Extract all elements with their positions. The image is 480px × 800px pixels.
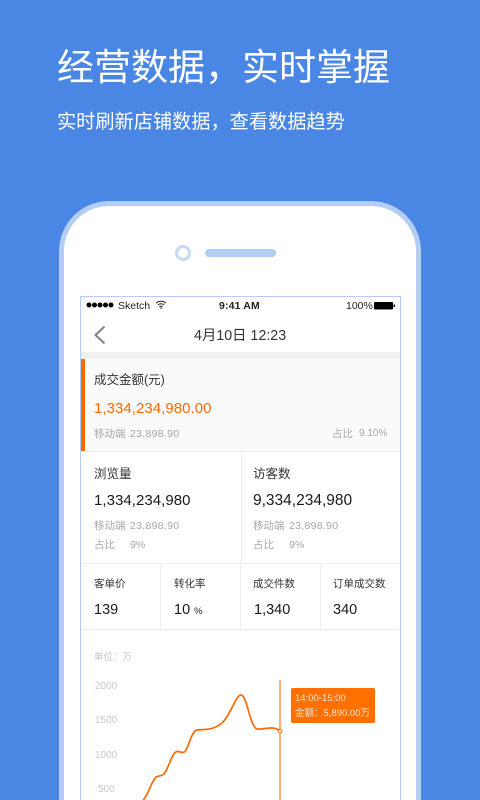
visitors value: 9,334,234,980 bbox=[253, 492, 352, 509]
status bar bbox=[86, 300, 395, 312]
marker line bbox=[279, 680, 281, 800]
views label: 浏览量 bbox=[94, 467, 132, 481]
sales mobile stat: 23,898.90 bbox=[130, 428, 179, 440]
items label: 成交件数 bbox=[253, 578, 295, 590]
items value: 1,340 bbox=[254, 602, 290, 618]
title: 经营数据，实时掌握 bbox=[57, 47, 390, 88]
views mobile stat: 移动端 bbox=[94, 520, 126, 532]
views mobile stat: 23,898.90 bbox=[130, 520, 179, 532]
panel: sales amount bbox=[81, 359, 400, 452]
panel: unit price bbox=[81, 564, 161, 630]
sales label: 成交金额(元) bbox=[94, 373, 165, 387]
panel: page views bbox=[81, 452, 242, 564]
visitors mobile stat bbox=[253, 520, 338, 532]
conversion value: 10 % bbox=[174, 602, 203, 618]
views share stat: 9% bbox=[130, 539, 145, 551]
line chart bbox=[142, 680, 282, 800]
sales share stat bbox=[332, 428, 387, 440]
tooltip time: 14:00-15:00 bbox=[295, 693, 346, 704]
views share stat bbox=[94, 539, 145, 551]
views share stat: 占比 bbox=[94, 539, 115, 551]
visitors label: 访客数 bbox=[253, 467, 291, 481]
unit price label: 客单价 bbox=[94, 578, 126, 590]
visitors share stat bbox=[253, 539, 304, 551]
tooltip amount: 金额：5,890.00万 bbox=[295, 708, 370, 719]
unit price value: 139 bbox=[94, 602, 118, 618]
carrier: Sketch bbox=[118, 300, 150, 312]
phone body bbox=[59, 201, 421, 800]
icon: back chevron bbox=[94, 326, 106, 344]
sales value: 1,334,234,980.00 bbox=[94, 400, 212, 417]
visitors share stat: 占比 bbox=[253, 539, 274, 551]
tooltip bbox=[291, 688, 375, 723]
panel: orders bbox=[321, 564, 400, 630]
panel: visitors bbox=[242, 452, 400, 564]
conversion label: 转化率 bbox=[174, 578, 206, 590]
y-axis labels bbox=[95, 681, 117, 795]
phone screen bbox=[80, 296, 401, 800]
clock: 9:41 AM bbox=[219, 300, 260, 312]
marker dot bbox=[278, 730, 282, 733]
views value: 1,334,234,980 bbox=[94, 492, 191, 509]
y-axis labels: 1000 bbox=[95, 750, 117, 761]
phone camera bbox=[175, 245, 191, 261]
panel: items sold bbox=[241, 564, 321, 630]
accent bar bbox=[81, 359, 85, 451]
sales share stat: 9.10% bbox=[359, 428, 387, 439]
panel: conversion rate bbox=[161, 564, 241, 630]
nav title: 4月10日 12:23 bbox=[194, 328, 286, 344]
chart unit label: 单位：万 bbox=[94, 652, 132, 663]
y-axis labels: 1500 bbox=[95, 715, 117, 726]
y-axis labels: 2000 bbox=[95, 681, 117, 692]
icon: battery bbox=[374, 302, 395, 310]
signal dots bbox=[86, 302, 114, 308]
visitors share stat: 9% bbox=[289, 539, 304, 551]
visitors mobile stat: 23,898.90 bbox=[289, 520, 338, 532]
battery percent: 100% bbox=[346, 300, 373, 312]
views mobile stat bbox=[94, 520, 179, 532]
orders value: 340 bbox=[333, 602, 357, 618]
sales curve bbox=[143, 695, 280, 800]
sales mobile stat bbox=[94, 428, 179, 440]
y-axis labels: 500 bbox=[98, 784, 115, 795]
phone speaker bbox=[205, 249, 276, 257]
icon: wifi bbox=[156, 300, 166, 309]
sales share stat: 占比 bbox=[332, 428, 353, 440]
orders label: 订单成交数 bbox=[333, 578, 386, 590]
visitors mobile stat: 移动端 bbox=[253, 520, 284, 532]
subtitle: 实时刷新店铺数据，查看数据趋势 bbox=[57, 112, 345, 133]
gray divider band bbox=[81, 352, 400, 359]
sales mobile stat: 移动端 bbox=[94, 428, 126, 440]
